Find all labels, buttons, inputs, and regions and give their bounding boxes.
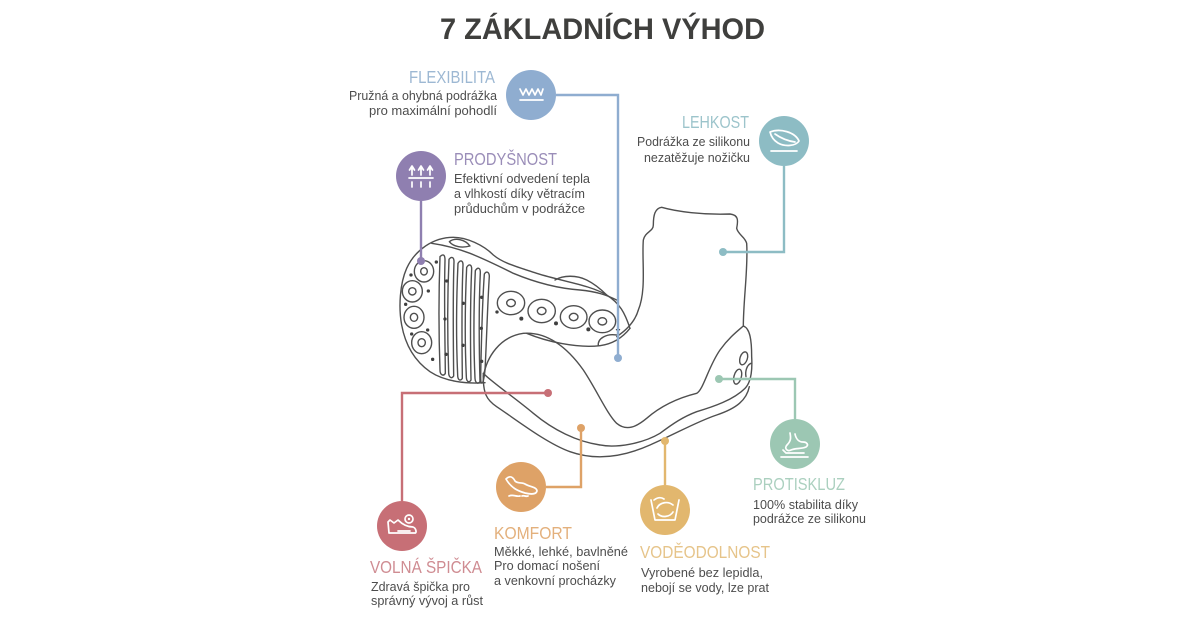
heading: protiskluz: PROTISKLUZ bbox=[753, 474, 845, 494]
connector: prodyšnost bbox=[417, 201, 425, 265]
icon: flexible sole bbox=[506, 70, 556, 120]
icon: shoe with roomy toe bbox=[377, 501, 427, 551]
heading: flexibilita: FLEXIBILITA bbox=[409, 67, 495, 87]
connector: lehkost bbox=[719, 166, 784, 256]
icon: wash basin bbox=[640, 485, 690, 535]
description: lehkost: nezatěžuje nožičku bbox=[644, 151, 750, 165]
description: prodyšnost: a vlhkostí díky větracím bbox=[454, 187, 585, 201]
description: komfort: a venkovní procházky bbox=[494, 574, 617, 588]
heading: volná špička: VOLNÁ ŠPIČKA bbox=[370, 556, 482, 577]
description: prodyšnost: průduchům v podrážce bbox=[454, 202, 585, 216]
description: prodyšnost: Efektivní odvedení tepla bbox=[454, 172, 590, 186]
description: voděodolnost: Vyrobené bez lepidla, bbox=[641, 566, 763, 580]
panel: lehkost bbox=[637, 112, 809, 166]
icon: foot on non-slip surface bbox=[770, 419, 820, 469]
panel: flexibilita bbox=[349, 67, 556, 120]
heading: komfort: KOMFORT bbox=[494, 523, 572, 543]
connector: voděodolnost bbox=[661, 437, 669, 485]
connector: flexibilita bbox=[556, 95, 622, 362]
description: flexibilita: Pružná a ohybná podrážka bbox=[349, 89, 497, 103]
heading: lehkost: LEHKOST bbox=[682, 112, 749, 132]
description: voděodolnost: nebojí se vody, lze prat bbox=[641, 581, 770, 595]
description: flexibilita: pro maximální pohodlí bbox=[369, 104, 498, 118]
description: komfort: Měkké, lehké, bavlněné bbox=[494, 545, 628, 559]
description: volná špička: Zdravá špička pro bbox=[371, 580, 470, 594]
panel: protiskluz bbox=[753, 419, 866, 526]
icon: feather bbox=[759, 116, 809, 166]
illustration: shoe sole bbox=[400, 237, 630, 383]
illustration: shoe upper bbox=[483, 207, 752, 457]
panel: voděodolnost bbox=[640, 485, 770, 595]
heading: voděodolnost: VODĚODOLNOST bbox=[640, 542, 770, 562]
connector: protiskluz bbox=[715, 375, 795, 419]
description: volná špička: správný vývoj a růst bbox=[371, 594, 484, 608]
connector: volná špička bbox=[402, 389, 552, 501]
description: protiskluz: podrážce ze silikonu bbox=[753, 512, 866, 526]
panel: volná špička bbox=[370, 501, 484, 608]
connector: komfort bbox=[546, 424, 585, 487]
description: komfort: Pro domací nošení bbox=[494, 559, 601, 573]
panel: komfort bbox=[494, 462, 628, 588]
description: protiskluz: 100% stabilita díky bbox=[753, 498, 859, 512]
title: 7 ZÁKLADNÍCH VÝHOD bbox=[440, 12, 765, 46]
panel: prodyšnost bbox=[396, 148, 590, 216]
description: lehkost: Podrážka ze silikonu bbox=[637, 135, 750, 149]
icon: soft shoe bbox=[496, 462, 546, 512]
heading: prodyšnost: PRODYŠNOST bbox=[454, 148, 557, 169]
icon: breathable arrows bbox=[396, 151, 446, 201]
